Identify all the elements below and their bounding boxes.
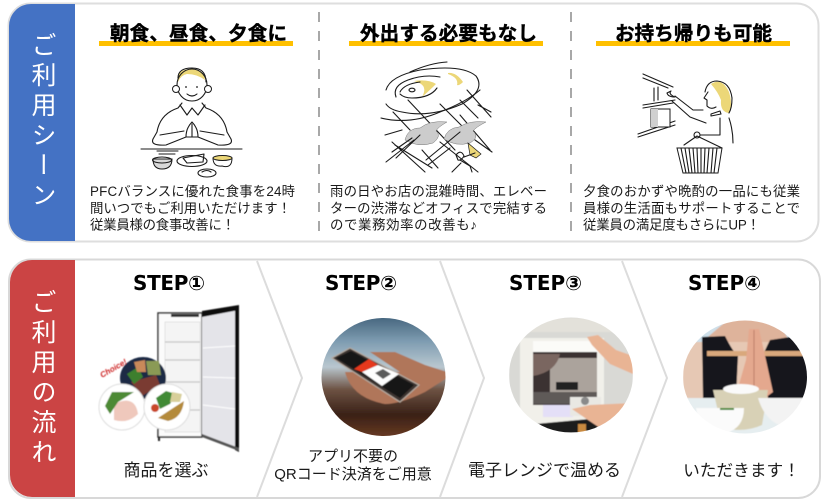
sidebar: usage scenes — [9, 4, 75, 241]
label: step 2 — [274, 448, 432, 483]
label: step 1: 商品を選ぶ — [124, 461, 208, 480]
chevron separators — [257, 261, 667, 497]
text: no need to go out description — [330, 184, 547, 232]
column: take-out — [583, 23, 800, 232]
panel: usage flow — [9, 260, 820, 498]
icon: storm and rain — [381, 62, 492, 172]
label: step 2: アプリ不要の — [308, 448, 398, 465]
heading: step 2: STEP② — [325, 271, 397, 295]
text: meals description: PFCバランスに優れた食事を24時 — [90, 184, 295, 199]
heading: meals: 朝食、昼食、夕食に — [110, 23, 287, 45]
text: take-out description: 従業員の満足度もさらにUP！ — [583, 218, 760, 232]
icon: man praying before a meal — [141, 68, 242, 177]
sidebar: usage flow — [10, 260, 75, 497]
text: take-out description: 員様の生活面もサポートすることで — [583, 201, 800, 216]
text: take-out description — [583, 184, 800, 232]
image: phone with QR payment — [320, 314, 448, 440]
step 2 — [274, 271, 448, 483]
text: meals description: 従業員様の食事改善に！ — [90, 216, 235, 232]
heading: step 4: STEP④ — [688, 271, 761, 295]
icon: woman shopping with basket — [638, 74, 733, 173]
text: meals description — [90, 184, 295, 232]
heading: take-out: お持ち帰りも可能 — [615, 23, 772, 45]
text: meals description: 間いつでもご利用いただけます！ — [90, 201, 291, 216]
column: no need to go out — [330, 23, 547, 232]
heading: step 3: STEP③ — [509, 271, 582, 295]
label: step 3: 電子レンジで温める — [468, 461, 621, 480]
column: meals — [90, 23, 295, 232]
heading: no need to go out: 外出する必要もなし — [360, 23, 537, 45]
sidebar: usage scenes: ご利用シーン — [28, 32, 56, 212]
heading: step 1: STEP① — [133, 271, 205, 295]
label: step 2: QRコード決済をご用意 — [274, 466, 432, 483]
step 1 — [98, 271, 239, 480]
step 3 — [468, 271, 633, 480]
image: person giving thanks before a meal — [683, 315, 808, 439]
text: take-out description: 夕食のおかずや晩酌の一品にも従業 — [583, 184, 800, 199]
sidebar: usage flow: ご利用の流れ — [28, 289, 56, 469]
label: step 4: いただきます！ — [683, 461, 800, 480]
text: no need to go out description: ターの渋滞などオフィスで完結する — [330, 201, 547, 216]
image: microwave oven — [509, 313, 633, 437]
step 4 — [683, 271, 808, 480]
text: no need to go out description: 雨の日やお店の混雑時間、エレベー — [330, 184, 547, 199]
panel: usage scenes — [8, 4, 818, 242]
text: no need to go out description: ので業務効率の改善も♪ — [330, 216, 477, 232]
image: freezer with meals: Choice! — [98, 357, 129, 380]
image: freezer with meals — [98, 305, 239, 452]
divider lines — [319, 12, 571, 232]
